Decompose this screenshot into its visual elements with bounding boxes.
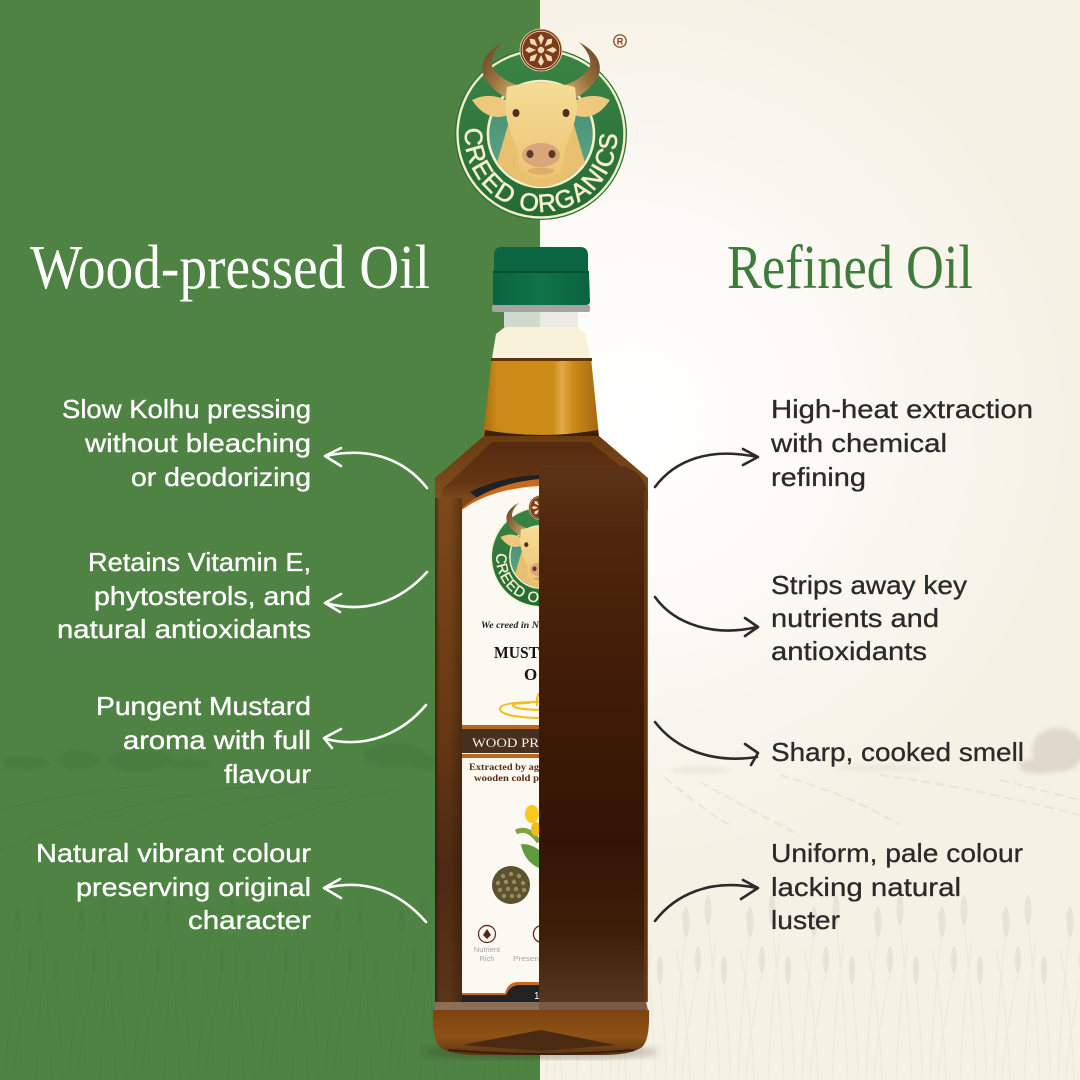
wood-pressed point 1: Slow Kolhu pressing xyxy=(62,394,311,424)
label: small logo: CREED O xyxy=(496,554,539,602)
bottle: amber oil in neck xyxy=(483,358,599,438)
label: wood pressed band xyxy=(462,725,539,758)
refined point 4: luster xyxy=(771,905,840,935)
bottle: label, left half xyxy=(462,475,540,1002)
label: bottom band: 1 xyxy=(534,991,540,1002)
bottle: base xyxy=(433,1002,649,1055)
background: left green panel xyxy=(0,0,540,1080)
wood-pressed point 1: or deodorizing xyxy=(131,462,311,492)
label: feature icons: Rich xyxy=(479,954,495,963)
wood-pressed point 1: without bleaching xyxy=(84,428,311,458)
label: feature icons xyxy=(474,926,539,963)
bottle: left body xyxy=(435,498,540,1002)
wood-pressed point 2 xyxy=(57,547,311,644)
wood-pressed point 3: aroma with full xyxy=(123,725,311,755)
wood-pressed point 3: flavour xyxy=(224,759,311,789)
wood-pressed point 3 xyxy=(96,691,311,789)
label: mustard seeds xyxy=(492,866,530,904)
logo: round badge xyxy=(455,48,627,220)
refined point 4: lacking natural xyxy=(771,872,961,902)
wood-pressed point 4: Natural vibrant colour xyxy=(36,838,311,868)
refined arrow 1 xyxy=(655,449,758,487)
label: product name xyxy=(494,643,540,684)
refined point 4 xyxy=(771,838,1023,935)
refined point 1: refining xyxy=(771,462,866,492)
bottle: green cap xyxy=(493,247,590,305)
logo: brand name: CREED ORGANICS xyxy=(464,128,618,212)
logo: flower emblem xyxy=(520,29,562,71)
label: wood pressed band: WOOD PR xyxy=(472,735,539,750)
brand logo xyxy=(455,28,627,220)
logo: registered mark xyxy=(614,35,626,47)
label: description xyxy=(469,763,539,784)
label: small logo xyxy=(490,495,539,608)
label: description: Extracted by ag xyxy=(469,763,539,773)
wood-pressed point 3: Pungent Mustard xyxy=(96,691,311,721)
background: right cream panel xyxy=(540,0,1080,1080)
refined point 4: Uniform, pale colour xyxy=(771,838,1023,868)
wood-pressed point 2: natural antioxidants xyxy=(57,614,311,644)
refined point 2 xyxy=(771,570,967,666)
label: tagline: We creed in N xyxy=(481,621,540,631)
logo: cow head xyxy=(472,42,610,187)
wood-pressed point 2: phytosterols, and xyxy=(94,581,311,611)
label: oil swirl xyxy=(500,693,539,718)
wood-pressed arrow 2 xyxy=(325,572,427,612)
wood-pressed arrow 3 xyxy=(324,705,426,748)
refined point 2: Strips away key xyxy=(771,570,967,600)
bottle shadow xyxy=(423,1045,659,1059)
refined arrow 4 xyxy=(655,880,758,921)
refined point 1: High-heat extraction xyxy=(771,394,1033,424)
refined arrow 2 xyxy=(655,597,758,636)
label: product name: MUST xyxy=(494,643,540,662)
refined point 2: nutrients and xyxy=(771,603,939,633)
bottle: clear neck xyxy=(492,305,590,327)
wood-pressed point 4: character xyxy=(188,905,311,935)
label: product name: O xyxy=(524,665,537,684)
label: mustard plant xyxy=(516,805,541,868)
refined point 2: antioxidants xyxy=(771,636,927,666)
wood-pressed point 4: preserving original xyxy=(76,872,311,902)
bottle: shoulder xyxy=(435,436,648,510)
label: bottom band xyxy=(462,982,540,1003)
wood-pressed point 4 xyxy=(36,838,311,935)
label: feature icons: Presen xyxy=(513,954,539,963)
heading: wood-pressed oil: Wood-pressed Oil xyxy=(30,234,430,302)
bottle xyxy=(432,247,650,1055)
refined arrow 3 xyxy=(655,722,758,765)
wood-pressed arrow 1 xyxy=(325,448,427,488)
wood-pressed point 2: Retains Vitamin E, xyxy=(88,547,311,577)
label: feature icons: Nutrient xyxy=(474,945,501,954)
label: description: wooden cold p xyxy=(474,774,539,784)
bottle: dark right half xyxy=(539,465,648,1002)
heading: refined oil: Refined Oil xyxy=(727,234,973,302)
refined point 3: Sharp, cooked smell xyxy=(771,737,1024,767)
refined point 1 xyxy=(770,394,1033,492)
wood-pressed arrow 4 xyxy=(324,879,426,922)
bottle: cream headspace xyxy=(492,327,590,358)
refined point 1: with chemical xyxy=(770,428,947,458)
logo: registered mark: R xyxy=(617,36,624,46)
wood-pressed point 1 xyxy=(62,394,311,492)
